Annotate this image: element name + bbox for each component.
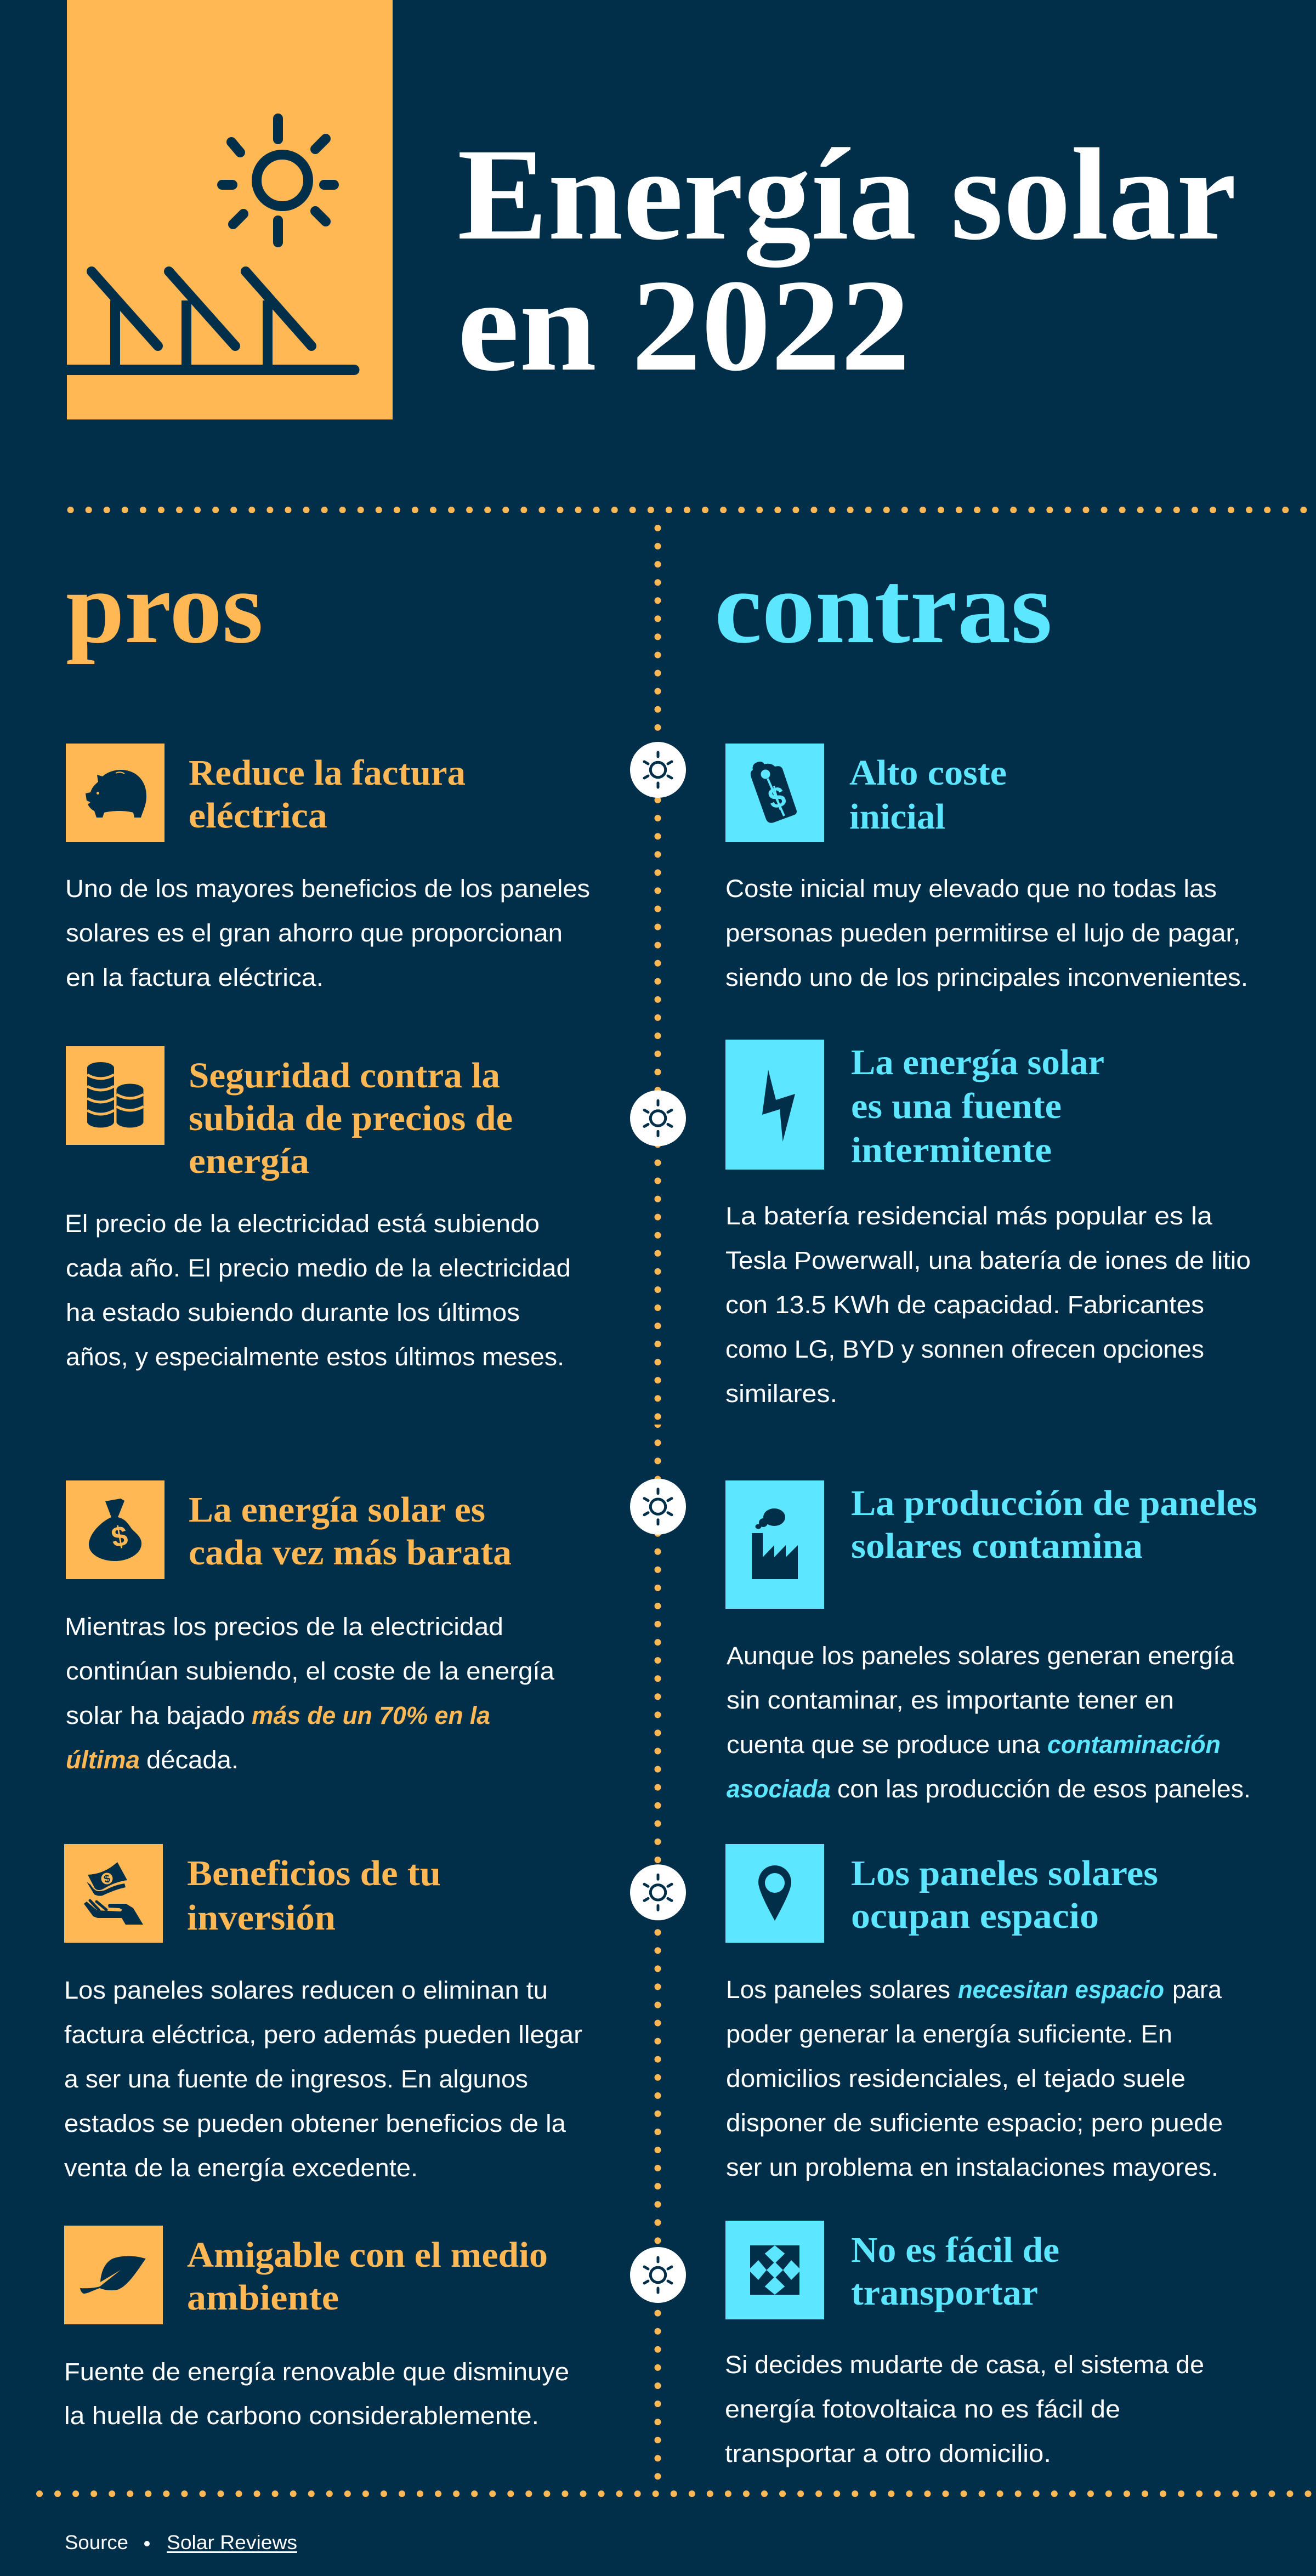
pro 1 text: solares es el gran ahorro que proporcionan [66,919,563,947]
pro 5 text: la huella de carbono considerablemente. [64,2402,539,2430]
pro 5: medio ambiente [64,2226,569,2430]
con 3 text: cuenta que se produce una [727,1730,1041,1758]
pro 3 text [65,1613,555,1774]
pro 1 heading [189,753,466,836]
icon: price tag [725,744,824,842]
pro 2 text: El precio de la electricidad está subiendo [65,1210,540,1238]
pro 4 heading: Beneficios de tu [187,1853,441,1893]
icon: moving arrows box [725,2221,824,2319]
pro 3 heading: La energía solar es [189,1490,485,1530]
timeline node 3 [630,1479,686,1535]
timeline node 5 [630,2247,686,2303]
pro 3 text: última [66,1746,140,1774]
icon: hand with money [64,1844,163,1943]
con 3 text [727,1642,1251,1803]
pro 3 text: continúan subiendo, el coste de la energía [66,1657,555,1685]
con 1: coste inicial [725,744,1248,991]
icon: leaf [64,2226,163,2324]
timeline node 1 [630,742,686,798]
con 4 text: Los paneles solares [726,1976,950,2004]
dotted divider: bottom [39,2490,1312,2497]
pro 3: más barata [65,1480,555,1774]
icon: money bag: $ [109,1520,130,1554]
con 1 heading [849,753,1007,837]
pro 3 text: década. [146,1746,239,1774]
con 4 text: para [1172,1976,1222,2004]
icon: coin stacks [66,1046,164,1145]
timeline node 4 [630,1864,686,1920]
pro 3 text: Mientras los precios de la electricidad [65,1613,503,1641]
con 3 text: Aunque los paneles solares generan energía [727,1642,1235,1670]
con 5 heading [851,2230,1059,2313]
con 4 heading: Los paneles solares [851,1853,1158,1893]
con 3 heading: La producción de paneles [851,1483,1257,1523]
heading: contras: contras [714,550,1052,665]
pro 3 text: más de un 70% en la [252,1701,490,1729]
title: en 2022 [457,252,910,398]
source footer: Solar Reviews [167,2531,297,2554]
icon: factory [725,1480,824,1609]
con 1 heading: Alto coste [849,753,1007,793]
pro 5 heading: ambiente [187,2278,339,2318]
con 2 heading: La energía solar [851,1042,1104,1082]
central timeline [630,528,686,2494]
pro 1 heading: Reduce la factura [189,753,466,793]
pro 2 heading: subida de precios de [189,1098,513,1138]
pro 2 heading: Seguridad contra la [189,1056,500,1096]
con 5: transporte [725,2221,1204,2467]
con 1 heading: inicial [849,797,945,837]
pro 2: seguridad [65,1046,571,1371]
pro 2 text [65,1210,571,1371]
title: Energía solar [457,121,1236,268]
pro 4 text [64,1976,582,2182]
pro 1 text [65,875,590,991]
icon: price tag: $ [765,780,789,816]
pro 4 text: Los paneles solares reducen o eliminan tu [64,1976,548,2004]
con 5 heading: No es fácil de [851,2230,1059,2270]
pro 3 heading [189,1490,512,1573]
con 4 heading [851,1853,1158,1936]
con 4 text: domicilios residenciales, el tejado suele [726,2064,1185,2092]
pro 4 text: a ser una fuente de ingresos. En algunos [64,2065,528,2093]
pro 2 heading: energía [189,1141,309,1181]
icon: lightning bolt [725,1040,824,1170]
pro 4: inversión [64,1844,582,2182]
header icon panel: sun and solar panels [67,0,393,419]
con 4 text: disponer de suficiente espacio; pero puede [726,2109,1223,2137]
con 1 text: Coste inicial muy elevado que no todas las [725,875,1217,903]
pro 2 text: ha estado subiendo durante los últimos [66,1298,520,1326]
pro 4 text: factura eléctrica, pero además pueden llegar [64,2021,582,2049]
con 4: espacio [725,1844,1223,2181]
con 2 heading: intermitente [851,1130,1052,1170]
con 3 heading [851,1483,1257,1566]
icon: piggy bank [66,744,164,842]
pro 1 text: Uno de los mayores beneficios de los paneles [65,875,590,903]
con 5 text [725,2351,1204,2467]
icon: sun [222,118,334,242]
pro 1 text: en la factura eléctrica. [66,963,324,991]
con 1 text: personas pueden permitirse el lujo de pagar, [725,919,1240,947]
con 2 text: similares. [725,1380,837,1408]
title [457,121,1236,398]
source footer: Source [65,2531,128,2554]
pro 5 heading [187,2235,548,2318]
pro 4 heading: inversión [187,1898,336,1938]
con 2 text: La batería residencial más popular es la [725,1202,1213,1230]
pro 4 text: venta de la energía excedente. [64,2154,418,2182]
pro 5 text: Fuente de energía renovable que disminuye [64,2358,569,2386]
con 3 heading: solares contamina [851,1526,1143,1566]
con 3: contaminación [725,1480,1257,1803]
con 5 text: transportar a otro domicilio. [725,2439,1051,2467]
con 5 text: energía fotovoltaica no es fácil de [725,2395,1120,2423]
con 5 text: Si decides mudarte de casa, el sistema de [725,2351,1204,2379]
source footer [65,2531,297,2554]
icon: hand with money: $ [103,1873,111,1886]
timeline node 2 [630,1090,686,1146]
con 3 text: con las producción de esos paneles. [837,1775,1251,1803]
con 4 text: necesitan espacio [958,1976,1164,2004]
pro 3 text: solar ha bajado [66,1701,245,1729]
pro 1: factura [65,744,590,991]
pro 4 text: estados se pueden obtener beneficios de la [64,2109,566,2137]
con 4 text: poder generar la energía suficiente. En [726,2020,1172,2048]
con 4 text: ser un problema en instalaciones mayores. [726,2153,1218,2181]
pro 3 heading: cada vez más barata [189,1533,512,1573]
pro 2 heading [189,1056,513,1181]
pro 4 heading [187,1853,441,1938]
con 2: intermitente [725,1040,1251,1408]
con 5 heading: transportar [851,2273,1038,2313]
con 3 text: contaminación [1047,1730,1221,1758]
con 2 text [725,1202,1251,1408]
con 2 text: Tesla Powerwall, una batería de iones de litio [725,1246,1251,1274]
icon: money bag [66,1480,164,1579]
con 4 text [726,1976,1223,2181]
con 1 text: siendo uno de los principales inconvenientes. [725,963,1248,991]
con 2 heading [851,1042,1104,1170]
pro 1 heading: eléctrica [189,796,327,836]
pro 5 text [64,2358,569,2430]
heading: pros: pros [66,550,263,665]
con 2 heading: es una fuente [851,1086,1062,1126]
con 1 text [725,875,1248,991]
pro 2 text: cada año. El precio medio de la electricidad [66,1254,571,1282]
icon: map pin [725,1844,824,1943]
dotted divider: top [71,507,1305,513]
con 2 text: con 13.5 KWh de capacidad. Fabricantes [725,1291,1204,1319]
con 3 text: asociada [727,1775,831,1803]
pro 5 heading: Amigable con el medio [187,2235,548,2275]
con 2 text: como LG, BYD y sonnen ofrecen opciones [725,1335,1204,1363]
pro 2 text: años, y especialmente estos últimos meses. [66,1343,564,1371]
con 3 text: sin contaminar, es importante tener en [727,1686,1174,1714]
icon: solar panels [67,271,360,375]
con 4 heading: ocupan espacio [851,1896,1099,1936]
